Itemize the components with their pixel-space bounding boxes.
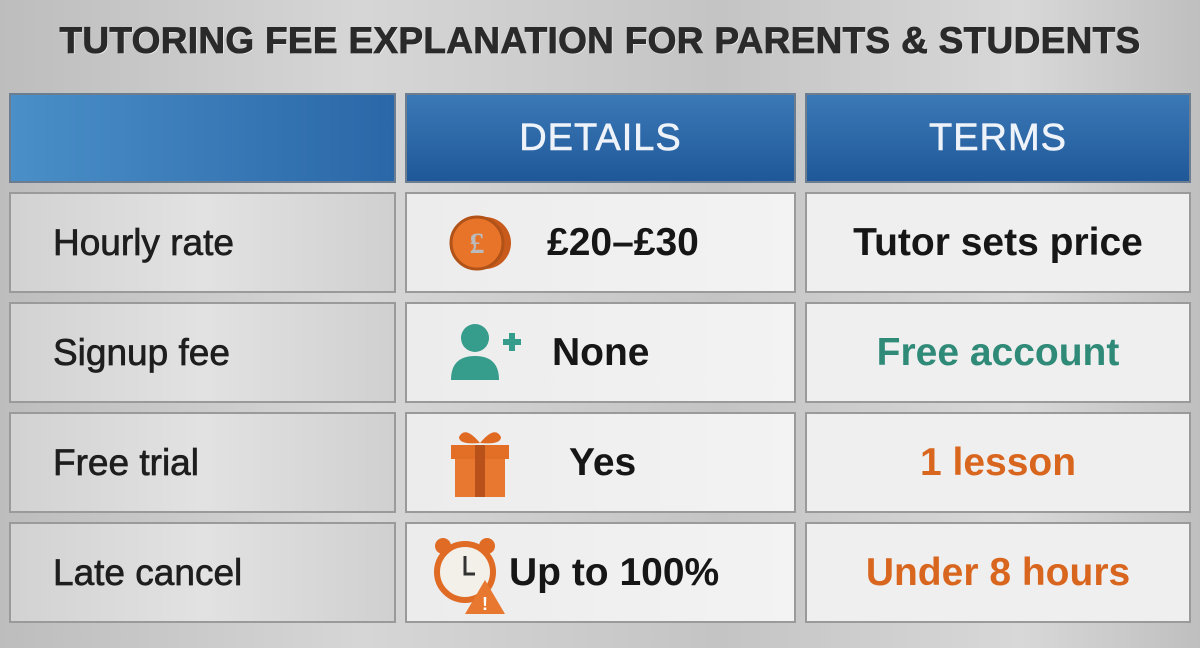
detail with coin icon: £20–£30 (547, 220, 699, 264)
detail with coin icon (405, 192, 796, 293)
icon: pound coin: £ (470, 226, 484, 260)
detail with user icon (405, 302, 796, 403)
label (9, 192, 396, 293)
label (9, 522, 396, 623)
icon: pound coin (450, 216, 511, 270)
label (9, 412, 396, 513)
title: TUTORING FEE EXPLANATION FOR PARENTS & STUDENTS (60, 20, 1140, 61)
header: terms: TERMS (929, 116, 1067, 158)
term (805, 412, 1191, 513)
label: Late cancel (53, 552, 242, 592)
row: late cancel (9, 522, 1191, 623)
term: 1 lesson (920, 440, 1076, 484)
term: Under 8 hours (866, 550, 1130, 594)
row: free trial (9, 412, 1191, 513)
label (9, 302, 396, 403)
row: signup fee (9, 302, 1191, 403)
label: Signup fee (53, 332, 230, 372)
term (805, 302, 1191, 403)
term: Tutor sets price (853, 220, 1143, 264)
row: hourly rate (9, 192, 1191, 293)
header blank (9, 93, 396, 183)
term (805, 192, 1191, 293)
header: details: DETAILS (519, 116, 682, 158)
icon: gift (451, 432, 509, 497)
detail with clock icon (405, 522, 796, 623)
detail with gift icon: Yes (569, 440, 636, 484)
icon: alarm clock: ! (482, 594, 488, 614)
detail with user icon: None (552, 330, 650, 374)
header: terms (805, 93, 1191, 183)
header row (9, 93, 1191, 183)
detail with clock icon: Up to 100% (509, 550, 719, 594)
label: Free trial (53, 442, 199, 482)
term: Free account (877, 330, 1119, 374)
label: Hourly rate (53, 222, 234, 262)
icon: alarm clock (434, 538, 505, 614)
detail with gift icon (405, 412, 796, 513)
term (805, 522, 1191, 623)
icon: add user (451, 324, 521, 380)
header: details (405, 93, 796, 183)
